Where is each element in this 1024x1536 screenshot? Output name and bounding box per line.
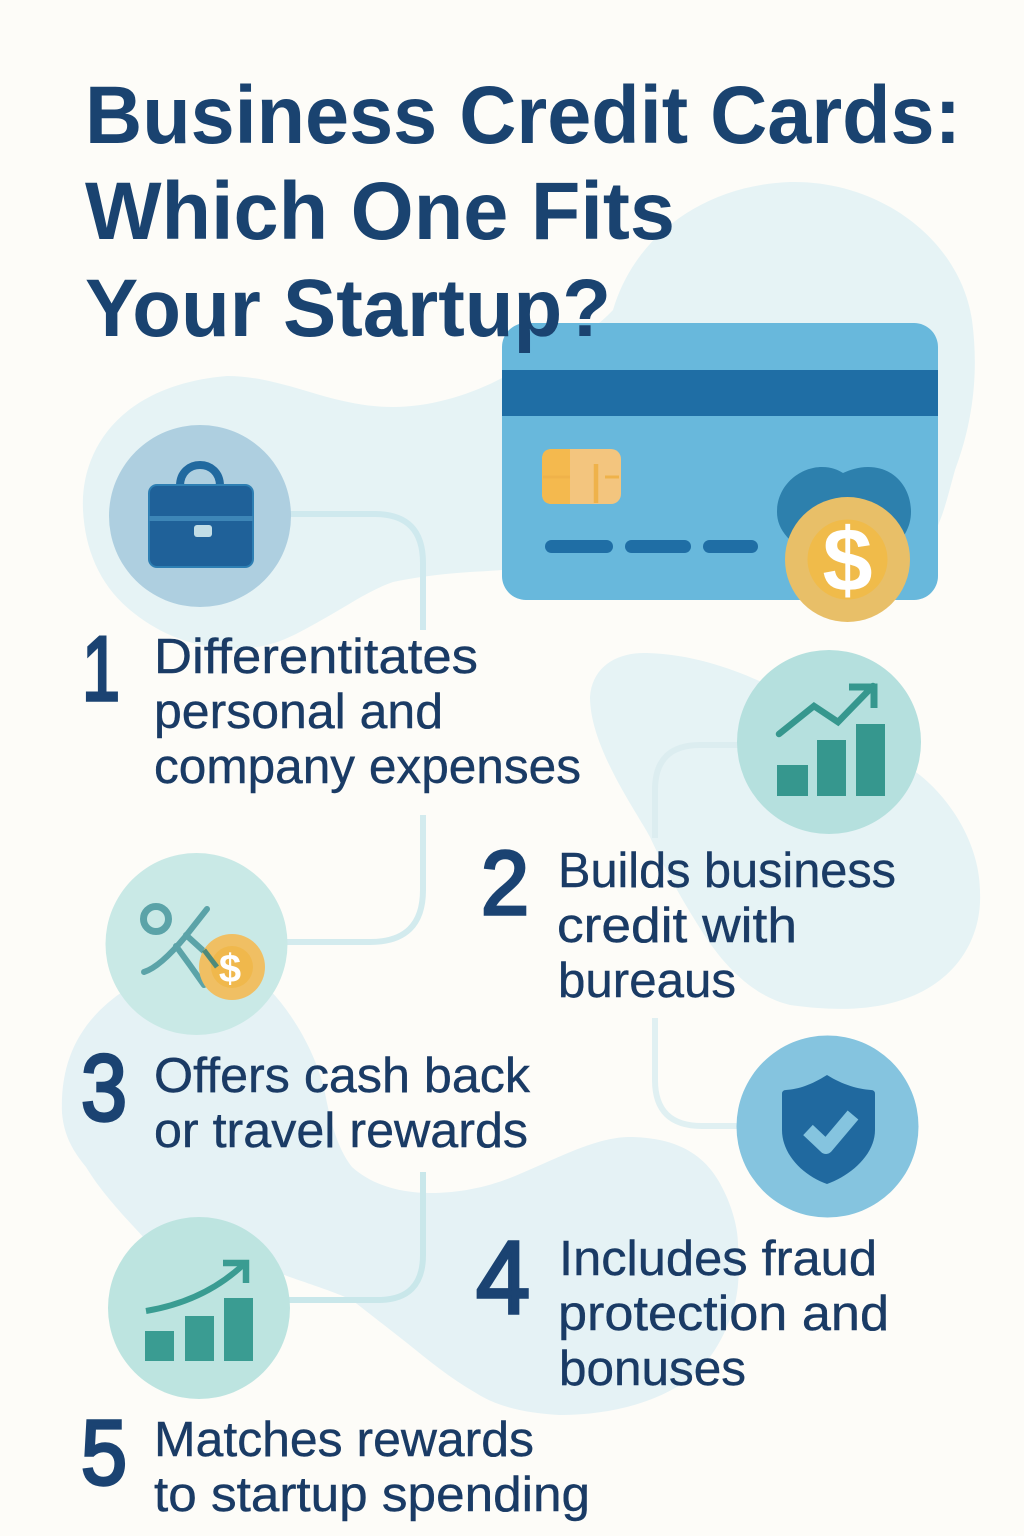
background blobs bbox=[62, 182, 980, 1415]
item 1: personal and bbox=[154, 685, 443, 739]
icon: percent and coin: $ bbox=[219, 947, 241, 991]
title: Business Credit Cards: bbox=[85, 70, 961, 161]
icon: percent and coin bbox=[106, 853, 288, 1035]
card number dashes bbox=[545, 540, 758, 553]
item 1: Differentitates bbox=[154, 630, 478, 684]
item 2 bbox=[481, 834, 896, 1008]
dollar coin bbox=[785, 497, 910, 622]
connector lines bbox=[280, 514, 742, 1300]
item 4: 4 bbox=[476, 1220, 530, 1335]
title: Your Startup? bbox=[85, 263, 611, 354]
item 3: Offers cash back bbox=[154, 1049, 531, 1103]
item 2: credit with bbox=[557, 899, 797, 953]
title: Which One Fits bbox=[85, 166, 675, 257]
item 3 bbox=[81, 1035, 531, 1158]
item 4: protection and bbox=[558, 1287, 889, 1341]
item 5 bbox=[81, 1402, 590, 1522]
item 2: bureaus bbox=[558, 954, 736, 1008]
chip bbox=[542, 449, 621, 504]
item 5: to startup spending bbox=[154, 1468, 590, 1522]
item 1: 1 bbox=[82, 619, 120, 720]
item 4 bbox=[476, 1220, 889, 1396]
icon: briefcase bbox=[109, 425, 291, 607]
item 5: Matches rewards bbox=[154, 1413, 534, 1467]
item 2: 2 bbox=[481, 834, 529, 934]
dark heart shape bbox=[777, 467, 911, 560]
icon: rising chart bbox=[737, 650, 921, 834]
item 3: 3 bbox=[81, 1035, 127, 1140]
item 3: or travel rewards bbox=[154, 1104, 528, 1158]
icon: growth bars bbox=[108, 1217, 290, 1399]
item 4: bonuses bbox=[559, 1342, 746, 1396]
item 1 bbox=[82, 619, 581, 794]
dollar coin: $ bbox=[822, 511, 873, 611]
item 1: company expenses bbox=[154, 740, 581, 794]
item 5: 5 bbox=[81, 1402, 127, 1504]
magnetic stripe bbox=[502, 370, 938, 416]
item 4: Includes fraud bbox=[559, 1232, 877, 1286]
title bbox=[85, 70, 961, 354]
icon: shield bbox=[736, 1036, 918, 1218]
item 2: Builds business bbox=[558, 844, 896, 898]
card body bbox=[502, 323, 938, 600]
credit card illustration bbox=[502, 323, 938, 622]
